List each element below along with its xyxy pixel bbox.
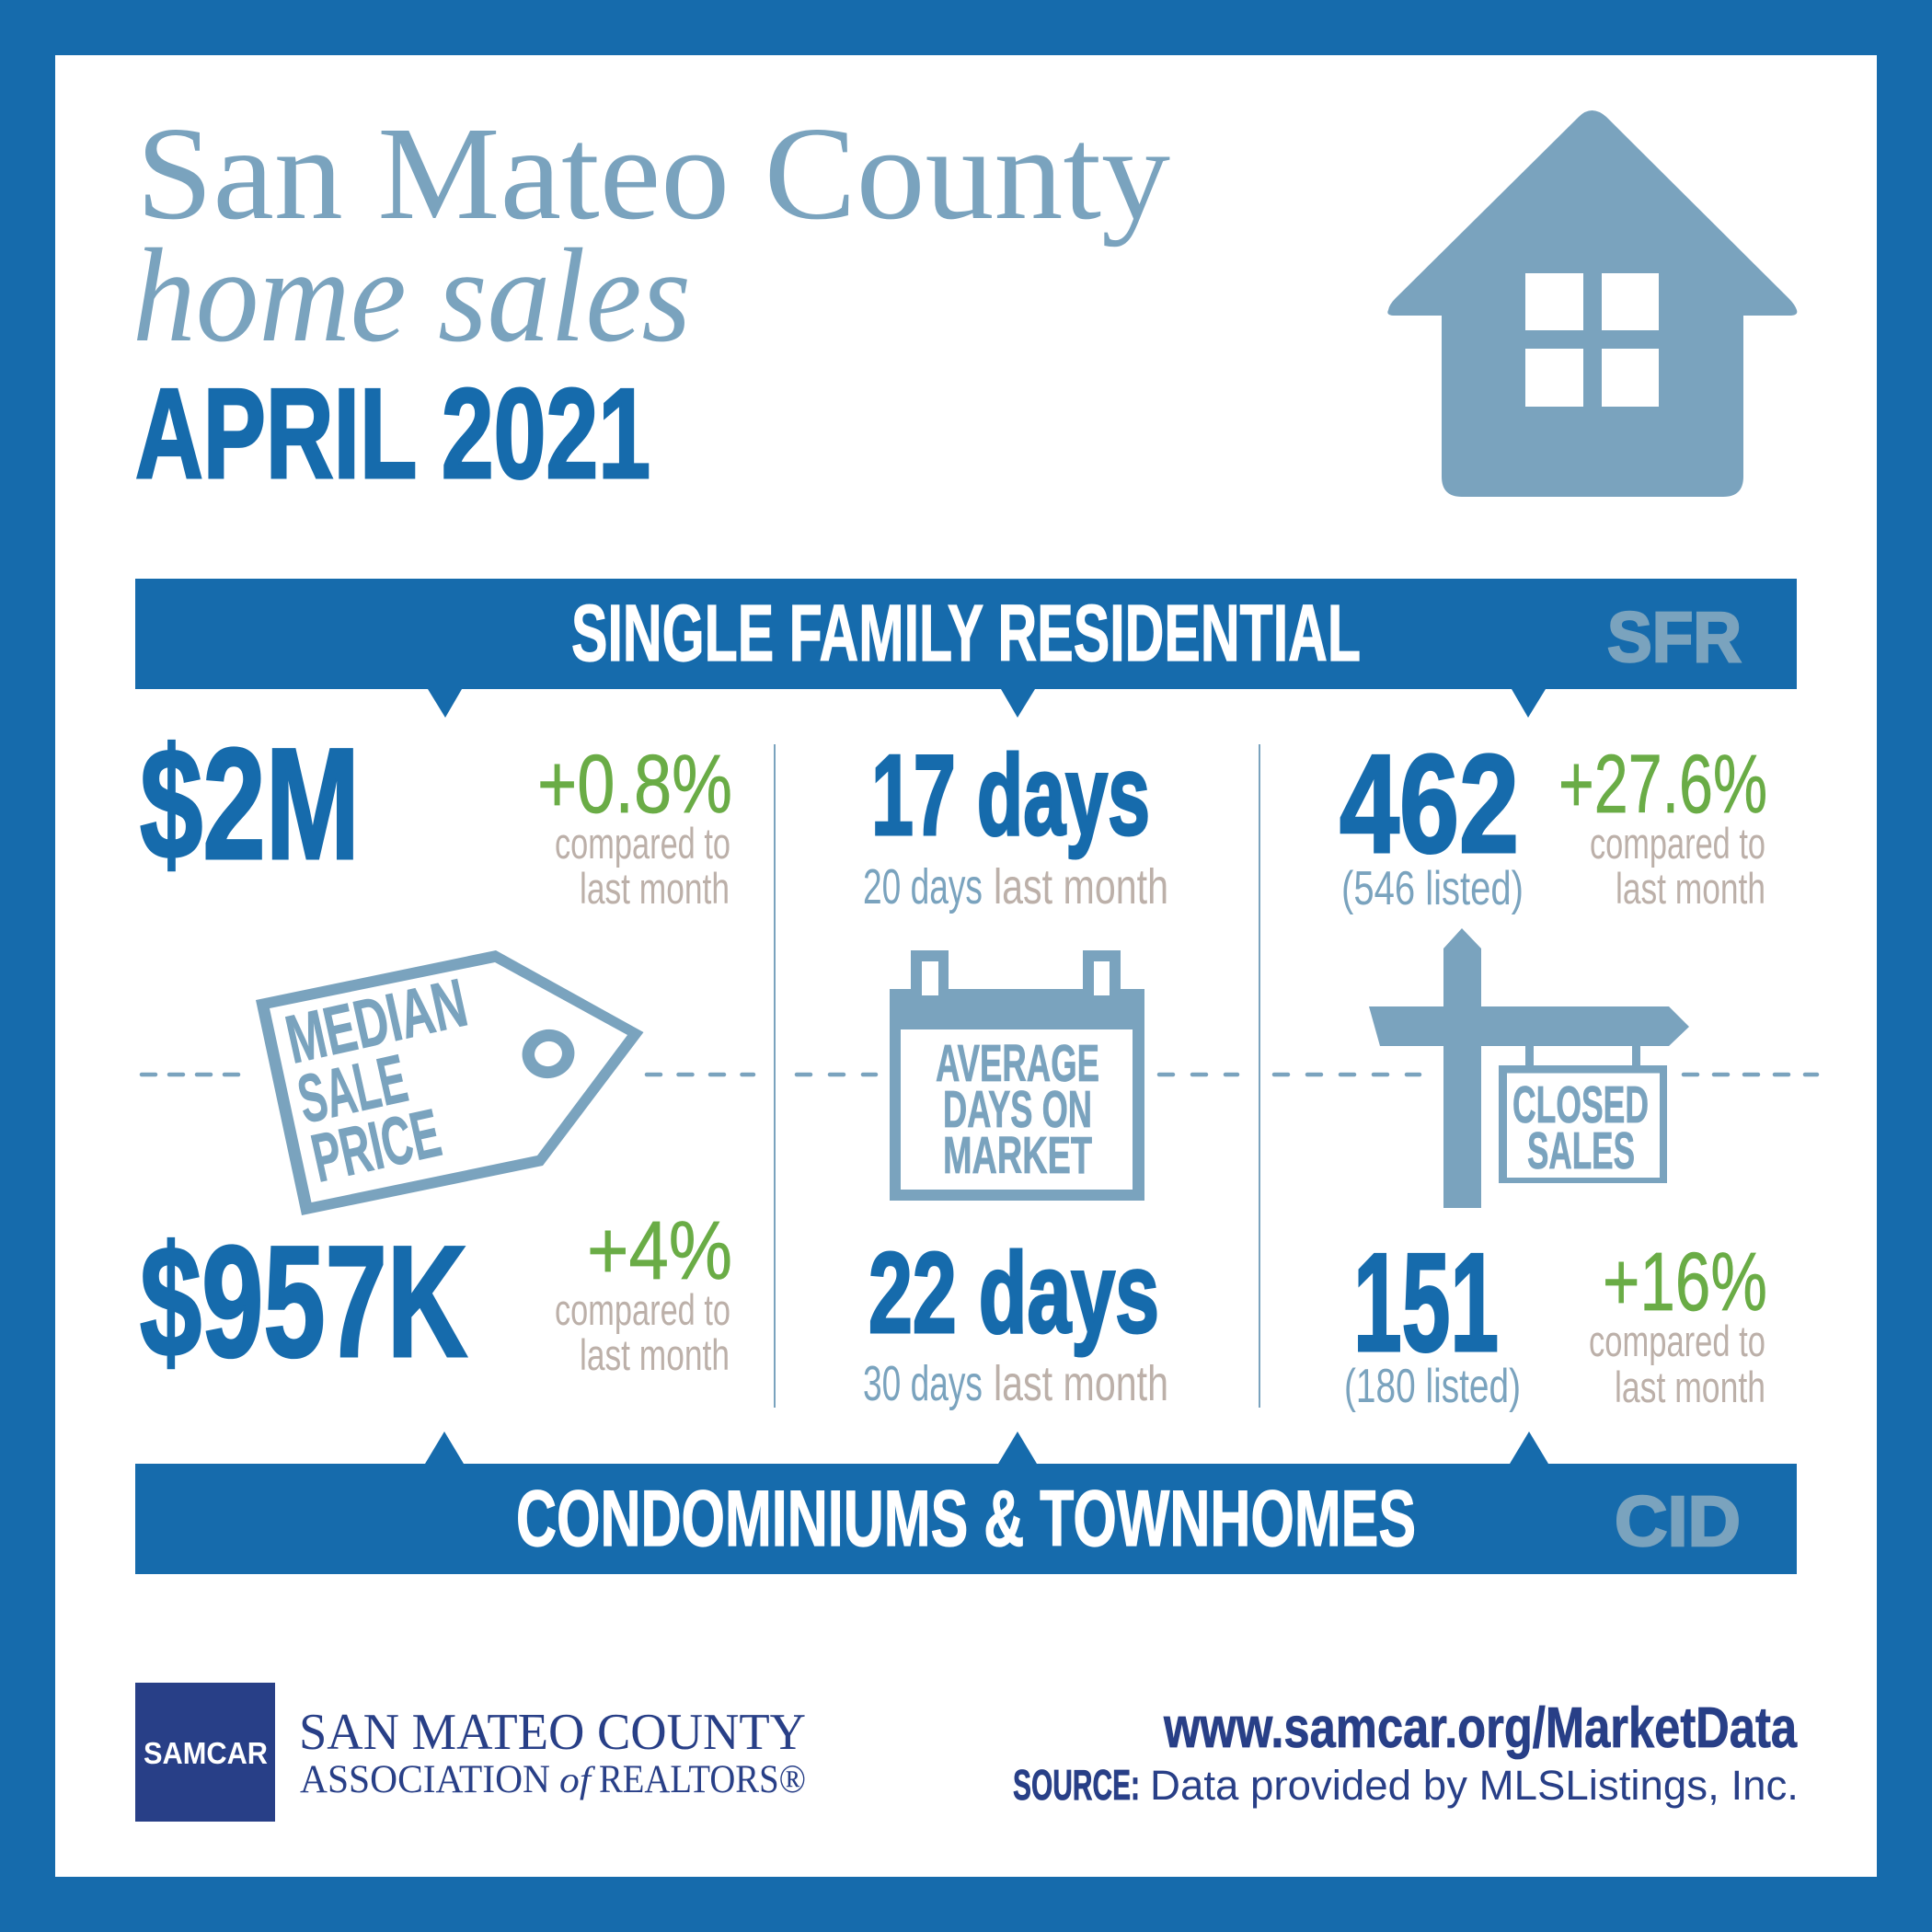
stat: SFR average days on market: 20 days — [863, 859, 983, 914]
stat: SFR median sale price: last month — [580, 864, 730, 913]
logo: SAMCAR: of — [559, 1759, 595, 1800]
column dividers — [774, 744, 1260, 1408]
stat: SFR closed sales: (546 listed) — [1341, 862, 1524, 915]
stat: CID median sale price: compared to — [555, 1285, 730, 1334]
icon: price tag: MEDIAN — [279, 964, 474, 1078]
stat: CID average days on market — [863, 1230, 1168, 1411]
stat: SFR closed sales: +27.6% — [1558, 739, 1767, 831]
stat: SFR closed sales: 462 — [1340, 726, 1519, 882]
stat: CID average days on market: last month — [994, 1356, 1168, 1411]
source and website — [1013, 1696, 1799, 1809]
stat: CID closed sales: compared to — [1589, 1317, 1765, 1365]
icon: calendar: DAYS ON — [943, 1080, 1092, 1139]
stat: CID closed sales: 151 — [1353, 1225, 1499, 1381]
dashed guide lines — [142, 1073, 1817, 1076]
banner: condominiums and townhomes: CONDOMINIUMS & TOWNHOMES — [516, 1475, 1416, 1563]
stat: CID closed sales — [1344, 1225, 1767, 1413]
stat: SFR closed sales — [1340, 726, 1767, 915]
icon: closed sales sign: SALES — [1527, 1121, 1635, 1180]
stat: SFR median sale price — [140, 716, 732, 913]
source and website: SOURCE: — [1013, 1761, 1140, 1809]
stat: SFR median sale price: compared to — [555, 819, 730, 868]
stat: CID average days on market: 22 days — [868, 1230, 1159, 1357]
logo: SAMCAR: ASSOCIATION — [300, 1758, 550, 1801]
icon: calendar — [890, 950, 1144, 1201]
banner: single family residential — [135, 579, 1797, 718]
icon: calendar: MARKET — [943, 1126, 1092, 1185]
icon: house — [1387, 110, 1797, 497]
stat: CID closed sales: (180 listed) — [1344, 1360, 1521, 1413]
icon: calendar: AVERAGE — [936, 1034, 1099, 1093]
title — [132, 100, 1170, 505]
banner: single family residential: SINGLE FAMILY RESIDENTIAL — [571, 589, 1361, 678]
icon: price tag — [256, 950, 644, 1215]
source and website: www.samcar.org/MarketData — [1163, 1696, 1797, 1760]
title: San Mateo County — [136, 100, 1170, 247]
stat: CID closed sales: +16% — [1603, 1236, 1767, 1328]
title: APRIL 2021 — [135, 362, 650, 505]
stat: SFR median sale price: $2M — [140, 716, 360, 892]
source and website: Data provided by MLSListings, Inc. — [1150, 1762, 1799, 1809]
stat: SFR average days on market: last month — [994, 859, 1168, 914]
stat: SFR closed sales: last month — [1616, 864, 1765, 913]
stat: SFR closed sales: compared to — [1590, 819, 1765, 868]
stat: SFR average days on market — [863, 732, 1168, 914]
logo: SAMCAR: SAMCAR — [144, 1736, 268, 1770]
banner: condominiums and townhomes: CID — [1615, 1482, 1741, 1561]
icon: closed sales sign — [1369, 928, 1689, 1208]
icon: price tag: SALE — [291, 1040, 414, 1138]
title: home sales — [132, 221, 691, 370]
stat: SFR median sale price: +0.8% — [537, 739, 732, 831]
banner: single family residential: SFR — [1607, 598, 1742, 677]
stat: CID median sale price: last month — [580, 1330, 730, 1379]
logo: SAMCAR: SAN MATEO COUNTY — [299, 1704, 806, 1761]
logo: SAMCAR: REALTORS® — [599, 1758, 806, 1801]
icon: closed sales sign: CLOSED — [1512, 1075, 1649, 1134]
stat: CID median sale price: +4% — [587, 1205, 732, 1297]
banner: condominiums and townhomes — [135, 1432, 1797, 1574]
stat: CID average days on market: 30 days — [863, 1356, 983, 1411]
stat: SFR average days on market: 17 days — [871, 732, 1150, 859]
stat: CID closed sales: last month — [1615, 1363, 1765, 1411]
stat: CID median sale price: $957K — [140, 1213, 467, 1390]
logo: SAMCAR — [135, 1683, 806, 1822]
icon: price tag: PRICE — [305, 1094, 447, 1197]
